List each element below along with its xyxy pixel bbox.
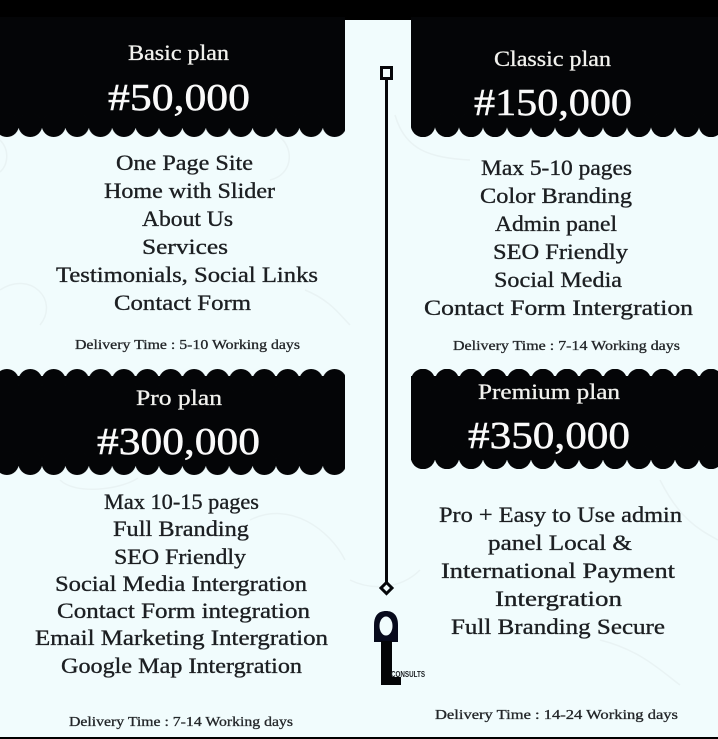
feature list: pro: Google Map Intergration	[61, 653, 302, 678]
panel: classic plan	[411, 17, 718, 353]
heading: Basic plan: Basic plan	[128, 40, 229, 65]
bottom black band	[0, 737, 718, 739]
header: basic plan	[0, 17, 345, 137]
header: classic plan	[411, 17, 718, 137]
feature list: pro: Contact Form integration	[57, 598, 310, 623]
panel: basic plan	[0, 17, 345, 352]
price: 300,000: #300,000	[97, 421, 260, 463]
feature list: premium: Intergration	[495, 586, 622, 611]
feature list: classic: Contact Form Intergration	[424, 295, 693, 320]
delivery time: pro: Delivery Time : 7-14 Working days	[69, 714, 293, 729]
feature list: pro: Full Branding	[113, 516, 249, 541]
feature list: classic	[424, 155, 693, 320]
top black band	[0, 0, 718, 20]
feature list: basic: One Page Site	[116, 150, 253, 175]
header: pro plan	[0, 369, 345, 475]
feature list: pro: Email Marketing Intergration	[35, 625, 328, 650]
feature list: pro: Social Media Intergration	[55, 571, 307, 596]
header: premium plan	[411, 369, 718, 469]
feature list: classic: Admin panel	[495, 211, 617, 236]
feature list: premium: Full Branding Secure	[451, 614, 665, 639]
feature list: basic: Testimonials, Social Links	[56, 262, 318, 287]
logo: L consults	[374, 611, 426, 685]
price: 50,000: #50,000	[108, 77, 250, 119]
feature list: premium: Pro + Easy to Use admin	[439, 502, 682, 527]
heading: Premium plan: Premium plan	[478, 379, 620, 404]
heading: Classic plan: Classic plan	[494, 46, 611, 71]
price: 150,000: #150,000	[474, 82, 632, 124]
panel: pro plan	[0, 369, 345, 729]
feature list: basic: Contact Form	[114, 290, 252, 315]
delivery time: basic: Delivery Time : 5-10 Working days	[75, 337, 300, 352]
price: 350,000: #350,000	[468, 415, 630, 457]
panel: premium plan	[411, 369, 718, 722]
feature list: classic: SEO Friendly	[493, 239, 629, 264]
feature list: pro: SEO Friendly	[114, 544, 247, 569]
feature list: classic: Color Branding	[480, 183, 632, 208]
feature list: pro	[35, 489, 328, 678]
feature list: premium: International Payment	[441, 558, 676, 583]
feature list: premium: panel Local &	[488, 530, 633, 555]
feature list: basic	[56, 150, 318, 315]
feature list: premium	[439, 502, 682, 639]
timeline connector	[381, 68, 392, 594]
delivery time: classic: Delivery Time : 7-14 Working days	[453, 338, 680, 353]
feature list: classic: Social Media	[494, 267, 622, 292]
feature list: pro: Max 10-15 pages	[104, 489, 259, 514]
logo text: CONSULTS	[391, 670, 426, 679]
feature list: basic: About Us	[142, 206, 233, 231]
feature list: classic: Max 5-10 pages	[481, 155, 632, 180]
feature list: basic: Home with Slider	[104, 178, 276, 203]
heading: Pro plan: Pro plan	[136, 385, 222, 410]
feature list: basic: Services	[142, 234, 228, 259]
delivery time: premium: Delivery Time : 14-24 Working days	[435, 707, 678, 722]
